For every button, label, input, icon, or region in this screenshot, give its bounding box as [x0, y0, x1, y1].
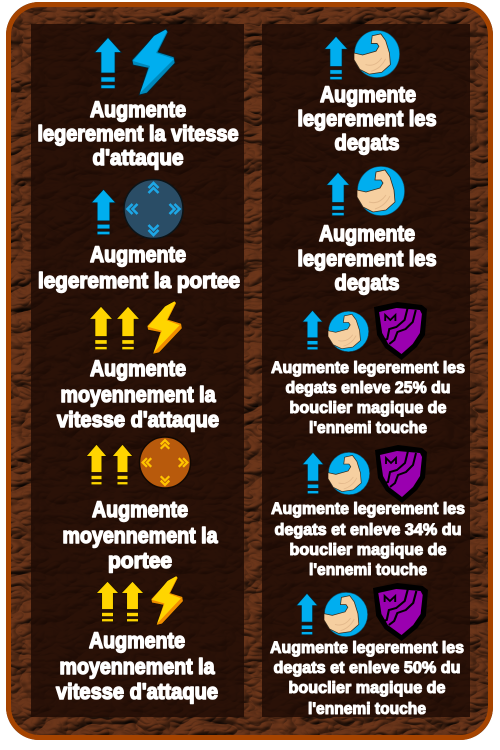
text: medium attack speed: vitesse d'attaque: [57, 407, 219, 432]
text: medium attack speed: moyennement la: [60, 654, 215, 679]
icon: blue arrow: [302, 310, 323, 350]
text: light damage: [298, 221, 436, 295]
icon: first yellow arrow: [86, 444, 107, 485]
text: damage and 50% shield: bouclier magique de: [288, 679, 446, 697]
icon: purple shield: [375, 445, 427, 503]
item: medium attack speed repeated: [56, 576, 218, 704]
text: light attack speed: [38, 97, 238, 170]
icon: blue lightning: [132, 29, 175, 95]
text: light damage: degats: [334, 270, 400, 295]
item: light damage repeated: [298, 166, 436, 295]
text: light damage: legerement les: [298, 246, 436, 271]
text: damage and 50% shield: l'ennemi touche: [308, 700, 426, 718]
item: damage and 34% magic shield: [271, 445, 465, 579]
panel: right column: [262, 24, 470, 718]
icon: blue arrow: [296, 593, 318, 635]
icon: blue arrow: [91, 189, 116, 235]
text: damage and 34% shield: [271, 500, 465, 579]
icon: purple shield: [374, 302, 427, 360]
icon: orange range circle: [140, 437, 190, 488]
item: damage and 25% magic shield: [271, 302, 465, 437]
icon: purple shield: [373, 583, 428, 641]
icon: blue range circle: [124, 180, 183, 238]
text: light damage: legerement les: [298, 106, 436, 131]
text: damage and 25% shield: [271, 359, 465, 437]
text: light range: legerement la portee: [38, 268, 240, 293]
icon: first yellow arrow: [89, 306, 113, 350]
text: damage and 50% shield: [270, 639, 464, 718]
text: damage and 34% shield: Augmente legerement les: [271, 500, 465, 518]
text: damage and 34% shield: bouclier magique de: [290, 541, 446, 559]
text: damage and 34% shield: degats et enleve 34% du: [274, 521, 462, 539]
icon: second yellow arrow: [121, 581, 144, 622]
text: light attack speed: Augmente: [90, 97, 186, 122]
icon: muscle: [354, 30, 400, 78]
icon: muscle: [324, 592, 368, 637]
text: light damage: Augmente: [320, 82, 416, 107]
panel: left column: [31, 24, 244, 717]
text: medium range: moyennement la: [62, 523, 218, 548]
text: damage and 50% shield: Augmente legerement les: [270, 639, 464, 657]
text: light damage: Augmente: [319, 221, 415, 246]
item: light damage: [298, 30, 436, 155]
text: light attack speed: legerement la vitesse: [38, 121, 238, 146]
text: light range: Augmente: [90, 242, 186, 267]
text: damage and 25% shield: Augmente legerement les: [271, 359, 465, 377]
text: medium attack speed: vitesse d'attaque: [56, 679, 218, 704]
text: light damage: [298, 82, 436, 155]
text: damage and 25% shield: l'ennemi touche: [309, 419, 427, 437]
text: medium range: Augmente: [92, 497, 188, 522]
icon: first yellow arrow: [96, 581, 119, 622]
icon: yellow lightning: [151, 576, 183, 625]
text: medium range: [62, 497, 218, 573]
item: medium range: [62, 437, 218, 573]
text: medium range: portee: [108, 548, 172, 573]
item: light attack speed: [38, 29, 238, 170]
item: light range: [38, 180, 240, 293]
icon: second yellow arrow: [116, 306, 140, 350]
icon: muscle: [357, 166, 404, 216]
icon: blue arrow: [324, 36, 348, 80]
text: medium attack speed: moyennement la: [60, 382, 216, 407]
text: medium attack speed: Augmente: [89, 628, 185, 653]
text: light attack speed: d'attaque: [92, 145, 184, 170]
text: medium attack speed: Augmente: [90, 356, 186, 381]
icon: blue arrow: [94, 38, 122, 88]
icon: yellow lightning: [147, 301, 182, 354]
text: damage and 25% shield: degats enleve 25% du: [286, 379, 450, 397]
text: light range: [38, 242, 240, 293]
text: medium attack speed: [57, 356, 219, 432]
text: damage and 50% shield: degats et enleve 50% du: [274, 659, 460, 677]
icon: blue arrow: [326, 172, 350, 216]
icon: muscle: [328, 311, 369, 352]
item: medium attack speed: [57, 301, 219, 432]
icon: second yellow arrow: [112, 444, 133, 485]
text: light damage: degats: [334, 130, 400, 155]
icon: blue arrow: [302, 452, 324, 494]
text: medium attack speed: [56, 628, 218, 704]
text: damage and 25% shield: bouclier magique de: [290, 399, 446, 417]
item: damage and 50% magic shield: [270, 583, 464, 718]
text: damage and 34% shield: l'ennemi touche: [309, 561, 427, 579]
icon: muscle: [328, 452, 370, 495]
